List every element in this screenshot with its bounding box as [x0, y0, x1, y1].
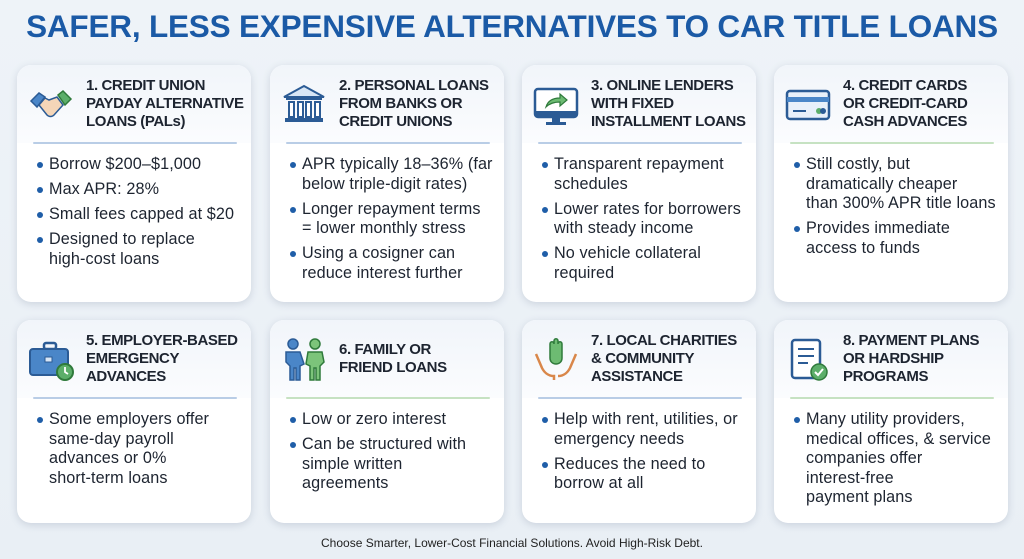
bullets: No vehicle collateral	[554, 244, 701, 262]
bullets: Using a cosigner can	[302, 244, 455, 262]
heading	[339, 77, 489, 130]
bullets: Can be structured with	[302, 435, 466, 453]
panel: 1 credit union PALs	[17, 65, 251, 302]
heading: OR HARDSHIP	[843, 350, 944, 367]
heading	[843, 77, 968, 130]
panel: 4 credit cards	[774, 65, 1008, 302]
icon: bank	[284, 84, 324, 122]
bullets: Borrow $200–$1,000	[49, 155, 201, 173]
heading: 8. PAYMENT PLANS	[843, 332, 979, 349]
heading: 5. EMPLOYER-BASED	[86, 332, 238, 349]
title: SAFER, LESS EXPENSIVE ALTERNATIVES TO CAR TITLE LOANS	[26, 8, 998, 44]
heading: 6. FAMILY OR	[339, 341, 431, 358]
heading: OR CREDIT-CARD	[843, 95, 967, 112]
heading	[843, 332, 979, 385]
bullets: dramatically cheaper	[806, 174, 957, 192]
heading: 4. CREDIT CARDS	[843, 77, 967, 94]
bullets: below triple-digit rates)	[302, 174, 467, 192]
icon: monitor	[534, 88, 578, 125]
bullets: Help with rent, utilities, or	[554, 410, 738, 428]
bullets: Longer repayment terms	[302, 200, 481, 218]
heading: ASSISTANCE	[591, 368, 683, 385]
heading: 7. LOCAL CHARITIES	[591, 332, 737, 349]
bullets: Some employers offer	[49, 410, 209, 428]
bullets: Many utility providers,	[806, 410, 965, 428]
bullets	[37, 155, 234, 268]
bullets: APR typically 18–36% (far	[302, 155, 493, 173]
bullets: short-term loans	[49, 468, 168, 486]
bullets: access to funds	[806, 238, 920, 256]
bullets: Max APR: 28%	[49, 180, 159, 198]
bullets: Designed to replace	[49, 230, 195, 248]
heading: 2. PERSONAL LOANS	[339, 77, 489, 94]
bullets: = lower monthly stress	[302, 219, 466, 237]
bullets	[542, 410, 738, 492]
bullets: agreements	[302, 474, 388, 492]
icon: document with check	[790, 338, 828, 381]
icon: briefcase with clock	[29, 342, 74, 381]
bullets	[37, 410, 209, 486]
heading: & COMMUNITY	[591, 350, 694, 367]
heading: 1. CREDIT UNION	[86, 77, 205, 94]
bullets: high-cost loans	[49, 250, 159, 268]
bullets	[542, 155, 741, 282]
bullets: Reduces the need to	[554, 454, 705, 472]
icon: credit card	[786, 90, 830, 120]
bullets: companies offer	[806, 449, 922, 467]
bullets: Low or zero interest	[302, 410, 446, 428]
bullets	[290, 155, 493, 282]
bullets: Provides immediate	[806, 219, 950, 237]
bullets: same-day payroll	[49, 430, 174, 448]
icon: two people	[285, 338, 325, 381]
heading	[86, 77, 244, 130]
bullets	[794, 155, 996, 256]
heading: LOANS (PALs)	[86, 113, 185, 130]
heading: 3. ONLINE LENDERS	[591, 77, 733, 94]
bullets: medical offices, & service	[806, 430, 991, 448]
icon: hands with heart	[534, 338, 578, 380]
bullets: interest-free	[806, 468, 894, 486]
heading: CASH ADVANCES	[843, 113, 967, 130]
heading: INSTALLMENT LOANS	[591, 113, 746, 130]
bullets: Lower rates for borrowers	[554, 200, 741, 218]
bullets: reduce interest further	[302, 264, 463, 282]
bullets: schedules	[554, 174, 628, 192]
bullets: required	[554, 264, 614, 282]
heading: WITH FIXED	[591, 95, 674, 112]
bullets: than 300% APR title loans	[806, 194, 996, 212]
bullets	[290, 410, 466, 492]
panel: 8 payment plans	[774, 320, 1008, 523]
bullets: advances or 0%	[49, 449, 166, 467]
heading: CREDIT UNIONS	[339, 113, 452, 130]
heading	[339, 341, 447, 376]
bullets: Small fees capped at $20	[49, 205, 234, 223]
heading	[86, 332, 238, 385]
heading: FRIEND LOANS	[339, 359, 447, 376]
heading	[591, 77, 746, 130]
bullets: payment plans	[806, 488, 913, 506]
panel: 2 personal loans	[270, 65, 504, 302]
bullets: with steady income	[554, 219, 693, 237]
heading: EMERGENCY	[86, 350, 179, 367]
heading: PAYDAY ALTERNATIVE	[86, 95, 244, 112]
heading: ADVANCES	[86, 368, 166, 385]
bullets: emergency needs	[554, 430, 684, 448]
bullets: borrow at all	[554, 474, 643, 492]
panel: 3 online lenders	[522, 65, 756, 302]
heading	[591, 332, 737, 385]
bullets: simple written	[302, 454, 402, 472]
panel: 5 employer advances	[17, 320, 251, 523]
bullets	[794, 410, 991, 506]
icon: handshake	[30, 90, 72, 118]
heading: PROGRAMS	[843, 368, 928, 385]
bullets: Still costly, but	[806, 155, 910, 173]
bullets: Transparent repayment	[554, 155, 724, 173]
panel: 6 family loans	[270, 320, 504, 523]
panel: 7 charities	[522, 320, 756, 523]
heading: FROM BANKS OR	[339, 95, 462, 112]
footer: Choose Smarter, Lower-Cost Financial Solutions. Avoid High-Risk Debt.	[321, 536, 703, 550]
